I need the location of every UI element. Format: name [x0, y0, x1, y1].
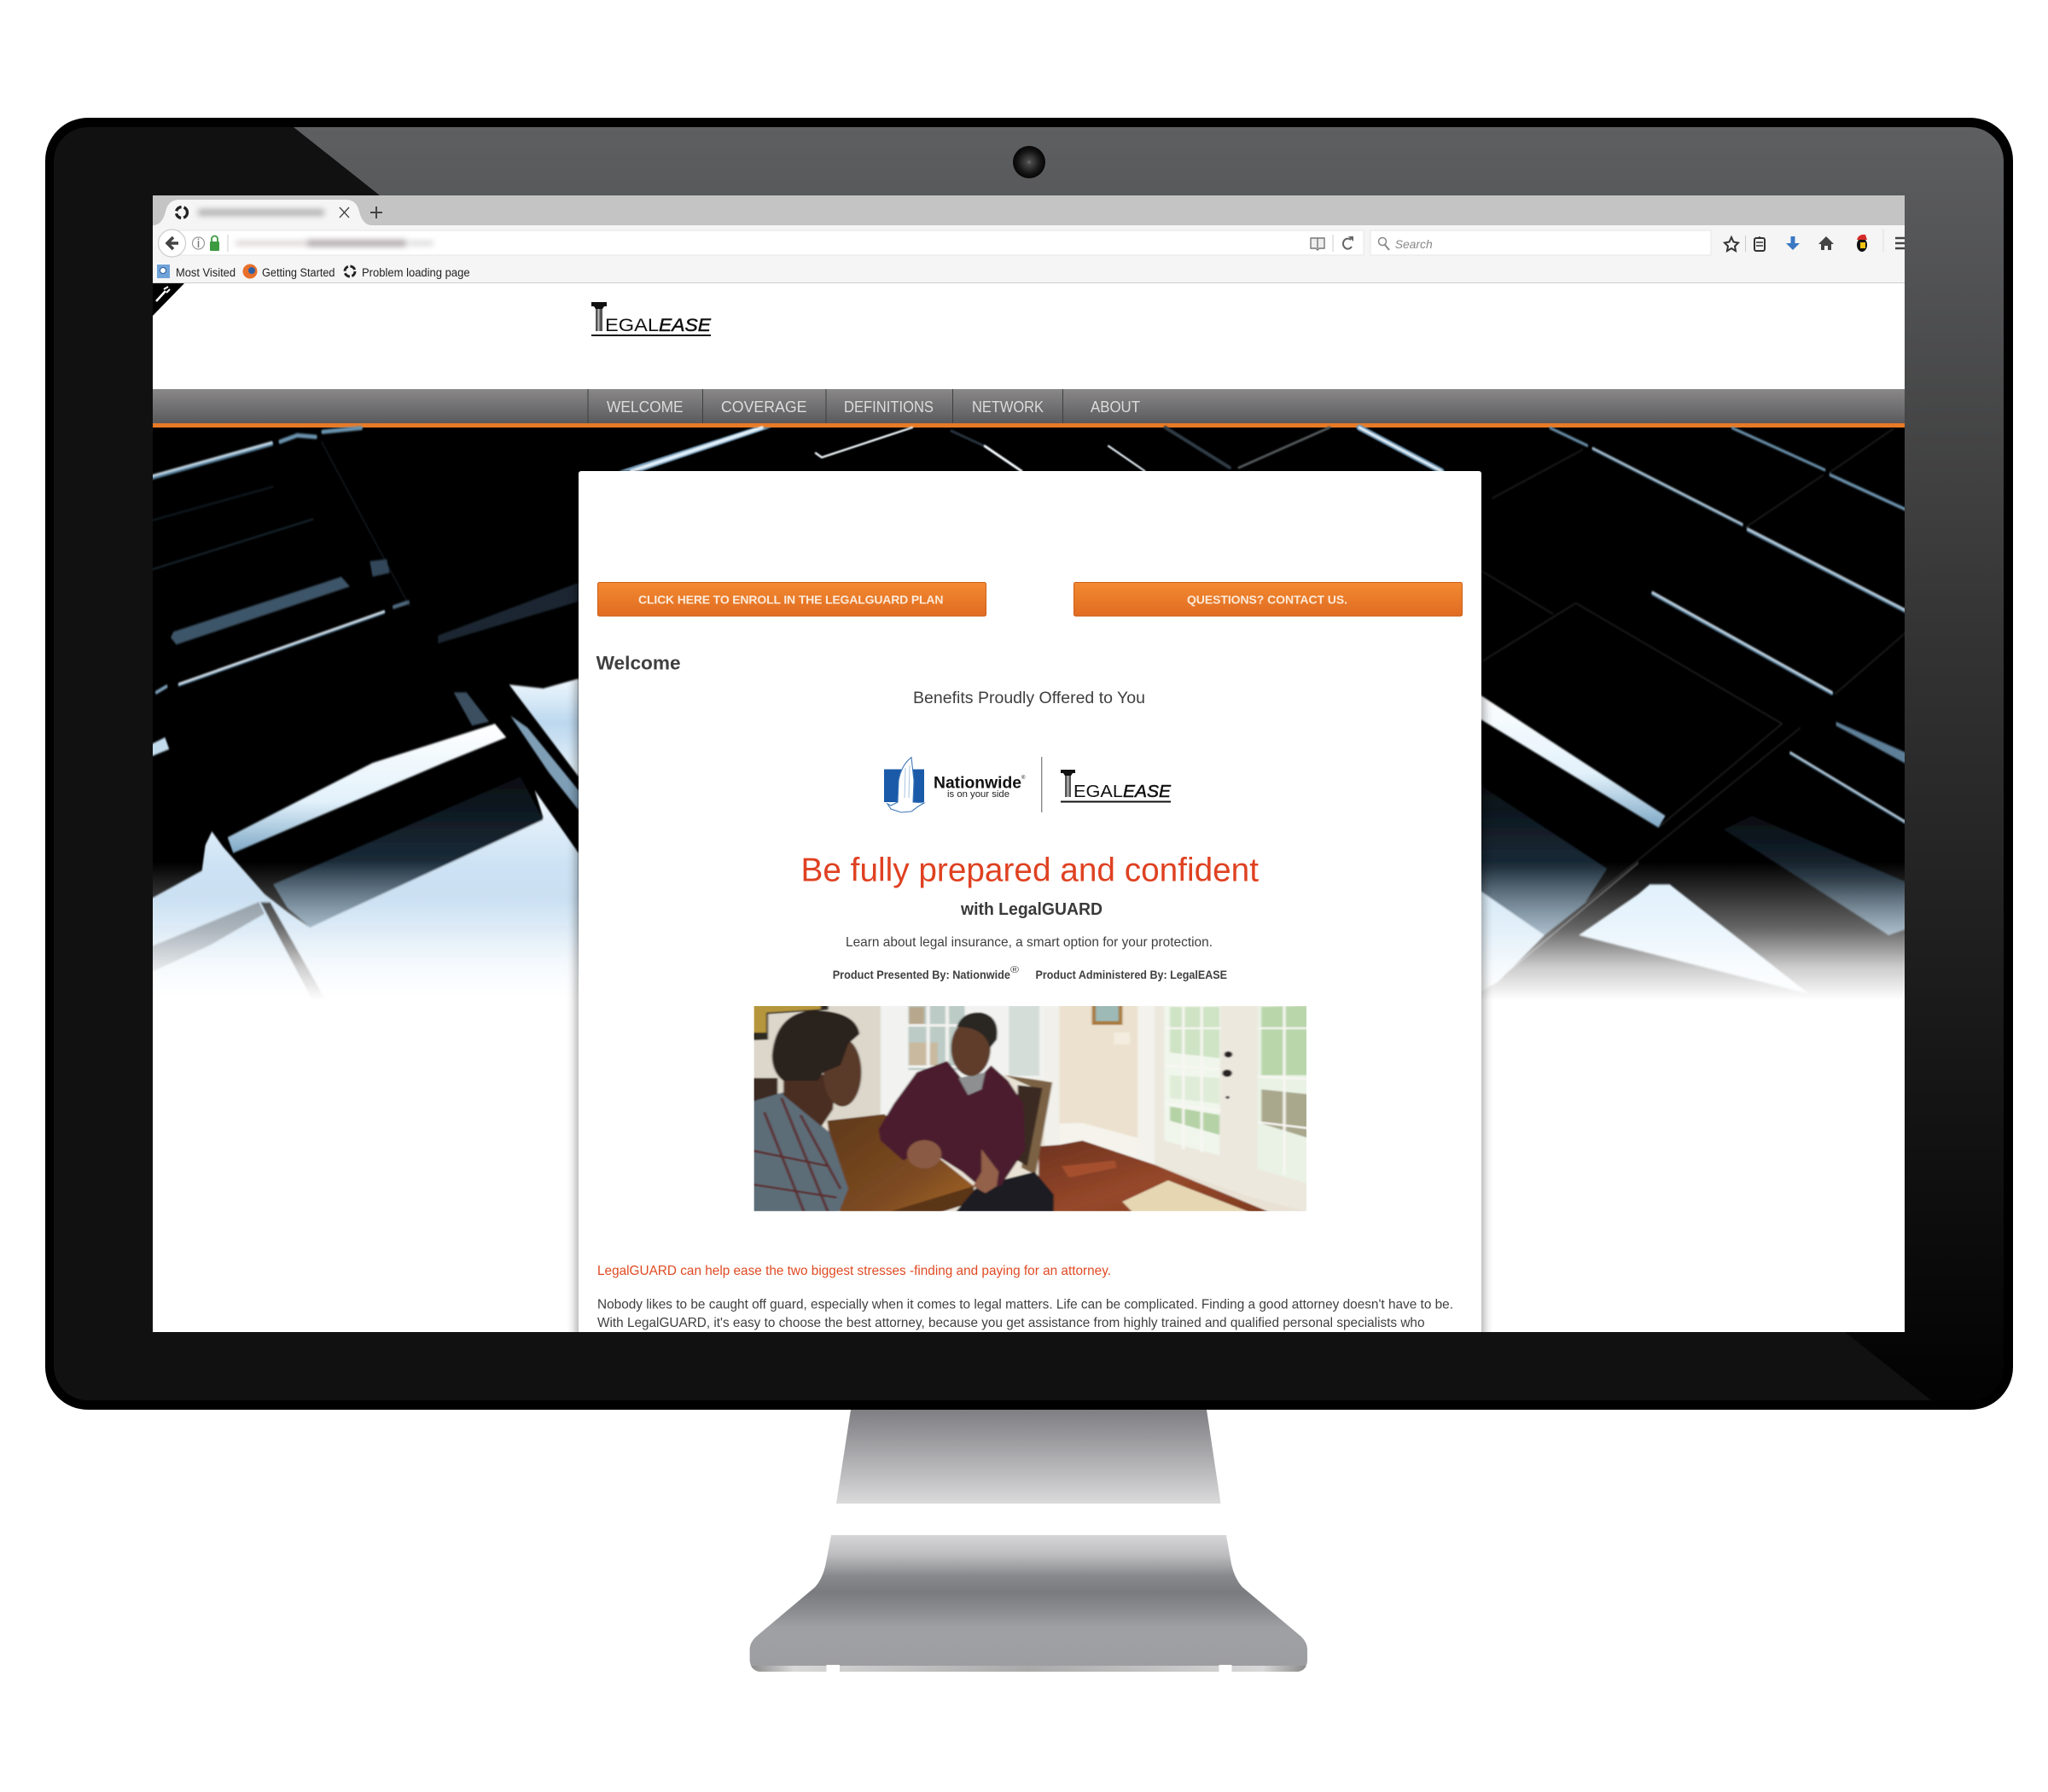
back button [159, 230, 186, 257]
hero left tiles [145, 428, 579, 1033]
nav labels [607, 399, 1140, 416]
reload icon [1343, 236, 1353, 249]
info icon [193, 237, 205, 249]
body paragraph: With LegalGUARD, it's easy to choose the best attorney, because you get assistance from highly trained and qualified personal specialists who [597, 1316, 1425, 1330]
headline: Be fully prepared and confident [800, 852, 1259, 889]
download arrow icon [1786, 236, 1800, 250]
product credits: Product Presented By: Nationwide [833, 968, 1010, 981]
logo divider [1041, 757, 1042, 812]
browser chrome [153, 195, 1907, 283]
new tab icon [370, 207, 382, 218]
lock icon [210, 236, 219, 251]
nav labels: NETWORK [972, 399, 1044, 416]
site header [153, 283, 1905, 336]
tab title blurred [198, 209, 324, 216]
nav labels: DEFINITIONS [844, 399, 934, 416]
toolbar [153, 225, 1905, 283]
enroll button: CLICK HERE TO ENROLL IN THE LEGALGUARD PLAN [638, 592, 944, 606]
tab bar [153, 195, 1905, 225]
active tab [153, 200, 372, 225]
monitor bezel [54, 127, 2004, 1400]
product credits: Product Administered By: LegalEASE [1036, 968, 1227, 981]
blurred url [236, 240, 433, 247]
heading: Welcome: Welcome [596, 653, 681, 674]
bookmarks bar [157, 265, 470, 279]
logo: LegalEASE small: EASE [1123, 783, 1172, 801]
content card [575, 471, 1485, 1345]
logo: LegalEASE small: EGAL [1073, 783, 1123, 801]
body intro in red: LegalGUARD can help ease the two biggest stresses -finding and paying for an attorney. [597, 1264, 1111, 1278]
extension icon [1857, 235, 1867, 252]
bookmarks bar: Getting Started [262, 266, 335, 279]
hero fade to white [153, 862, 1905, 1051]
search box [1370, 230, 1711, 255]
photo: two men talking at a table [745, 1001, 1317, 1218]
tab close icon [340, 207, 349, 218]
logo: LegalEASE small [1061, 770, 1172, 802]
body paragraph [597, 1297, 1453, 1330]
contact button [1073, 582, 1463, 616]
monitor stand neck [836, 1410, 1220, 1504]
bookmark icon: firefox [242, 265, 258, 278]
contact button: QUESTIONS? CONTACT US. [1187, 592, 1347, 606]
monitor stand base [742, 1535, 1314, 1672]
enroll button [597, 582, 986, 616]
intro line: Learn about legal insurance, a smart option for your protection. [846, 935, 1213, 950]
home icon [1818, 236, 1834, 250]
bookmark icon: problem page [345, 266, 355, 276]
webcam [1013, 146, 1045, 178]
logo: Nationwide: is on your side [947, 789, 1009, 800]
nav labels: ABOUT [1091, 399, 1140, 416]
body paragraph: Nobody likes to be caught off guard, especially when it comes to legal matters. Life can be complicated. Finding a good attorney doesn't have to be. [597, 1297, 1453, 1312]
nav labels: COVERAGE [721, 399, 807, 416]
logo: LegalEASE: EGAL [605, 316, 659, 335]
logo: Nationwide: ® [1021, 775, 1026, 781]
logo: LegalEASE [591, 302, 712, 336]
navigation bar [153, 389, 1905, 428]
tab favicon [176, 207, 188, 218]
hero right tiles [1476, 428, 1911, 994]
logo: Nationwide [884, 758, 1026, 812]
monitor outer frame [45, 118, 2013, 1410]
reading list icon [1754, 236, 1765, 251]
star icon [1725, 237, 1738, 251]
screen [145, 195, 1911, 1345]
subheadline: with LegalGUARD [960, 899, 1103, 919]
bookmarks bar: Most Visited [176, 266, 236, 279]
logo: LegalEASE: EASE [659, 316, 712, 335]
bookmark icon: most visited [157, 265, 170, 278]
reader icon [1311, 238, 1324, 250]
search icon [1379, 237, 1389, 250]
wrench corner tab [153, 283, 184, 316]
search placeholder: Search [1395, 237, 1433, 251]
nav labels: WELCOME [607, 399, 684, 416]
hero background image [145, 428, 1911, 1051]
bookmarks bar: Problem loading page [362, 266, 470, 279]
logo: Nationwide: Nationwide [934, 775, 1021, 792]
hero top strip highlights [619, 428, 1441, 471]
url bar [166, 230, 1364, 255]
product credits: ® [1010, 965, 1019, 975]
product credits [833, 965, 1227, 981]
subheading: benefits: Benefits Proudly Offered to You [913, 689, 1145, 707]
menu icon [1895, 238, 1907, 248]
